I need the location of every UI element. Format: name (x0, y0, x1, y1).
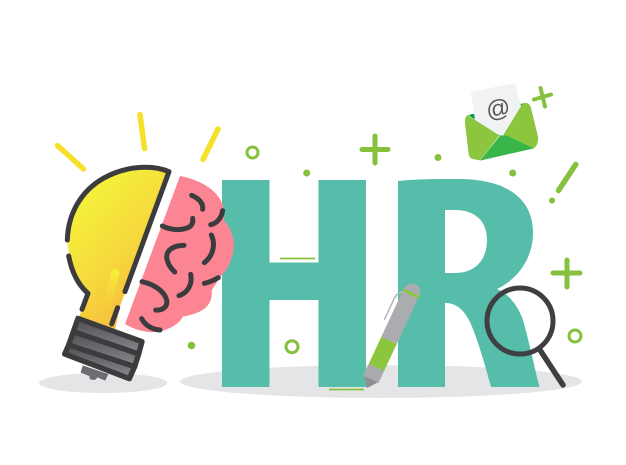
letter H (222, 180, 366, 387)
at sign: @ (484, 93, 513, 125)
bulb: glass (68, 167, 168, 330)
pen: clip (385, 289, 404, 322)
envelope: right flap (503, 103, 538, 148)
letter R (398, 179, 540, 387)
envelope (465, 83, 538, 161)
pen: tip (359, 375, 378, 392)
pen (355, 279, 423, 392)
shadow: under bulb (39, 373, 167, 393)
pen: grip (369, 337, 397, 371)
pen: band (403, 289, 419, 299)
magnifying glass (487, 288, 563, 385)
brain: folds (142, 195, 223, 330)
pen: upper barrel (381, 280, 423, 344)
brain (125, 176, 234, 332)
brain: pink lobes (125, 176, 234, 332)
bulb: screw base (65, 318, 142, 379)
bulb: nub (81, 365, 108, 381)
envelope: left flap (465, 115, 499, 160)
dots (188, 154, 516, 349)
shadow: under letters (180, 365, 582, 398)
rings (247, 147, 581, 353)
accent lines (280, 258, 364, 390)
pen: lower barrel (363, 364, 384, 383)
exclamation mark (549, 164, 576, 204)
bulb: outline (67, 167, 169, 324)
plus signs (362, 88, 580, 287)
bulb: glow (103, 273, 115, 317)
envelope: bottom flap (480, 135, 534, 161)
envelope: inner (468, 103, 528, 137)
light bulb (65, 167, 169, 381)
rays of light (58, 114, 218, 169)
